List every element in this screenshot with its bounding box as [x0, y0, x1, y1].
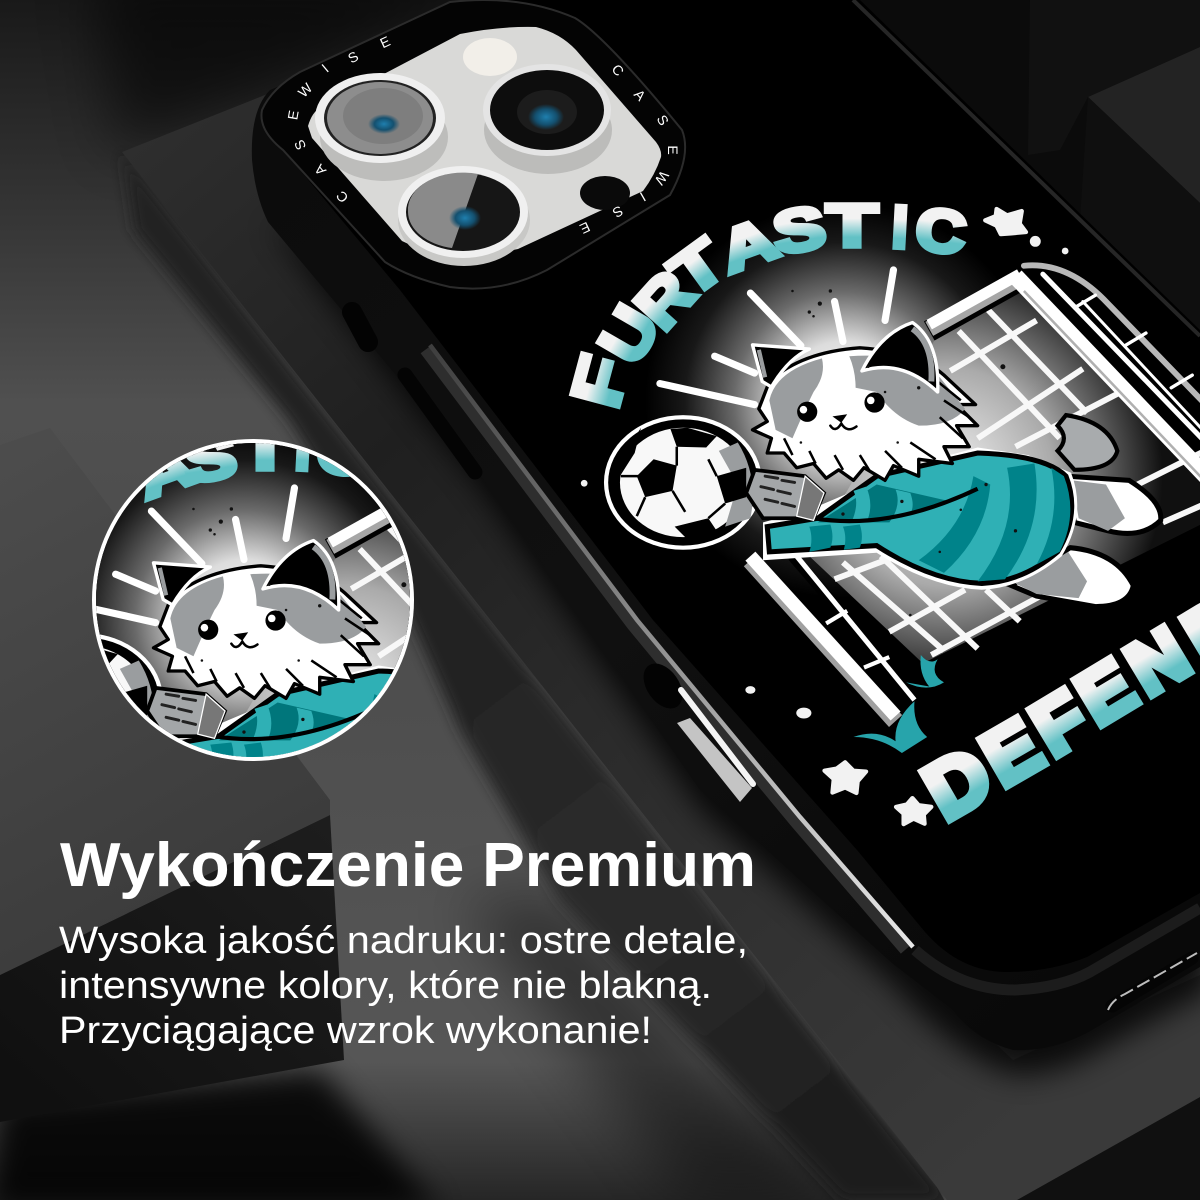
brand text on rim: E: [377, 33, 393, 51]
grey patch right: [849, 356, 965, 426]
speckle texture: [791, 289, 1017, 616]
description text: Wysoka jakość nadruku: ostre detale,: [59, 920, 748, 962]
lens: bottom: [398, 166, 530, 266]
eyes: [797, 402, 817, 422]
phone title: FURTASTIC: C: [912, 194, 970, 267]
glow behind cat: [645, 203, 1041, 598]
phone title: FURTASTIC: A: [710, 204, 786, 286]
nose and mouth: [832, 414, 847, 423]
cropped title letters: T: [239, 416, 291, 483]
silver button highlight: [681, 690, 753, 784]
silver button plate: [677, 718, 752, 802]
grey patch left: [769, 358, 823, 438]
phone case body: [252, 0, 1200, 1050]
stars: [824, 209, 1026, 824]
charging port: [1112, 958, 1192, 1006]
magnified detail circle: [92, 439, 414, 761]
brand text on rim: [284, 33, 681, 237]
back edge line: [853, 0, 1200, 336]
glove: [746, 470, 824, 520]
brand text on rim: I: [637, 189, 649, 205]
brand text on rim: W: [295, 79, 316, 100]
brand text on rim: I: [318, 61, 332, 75]
cropped title letters: C: [313, 416, 371, 489]
port highlight: [1108, 953, 1197, 1010]
cat head: [753, 323, 978, 480]
goal frame: [750, 274, 1200, 721]
phone title: FURTASTIC: S: [768, 193, 830, 267]
volume button: [405, 375, 475, 472]
fur strokes: [784, 381, 969, 472]
action button: [352, 312, 368, 342]
left ear: [753, 345, 809, 387]
goal back rim: [1024, 265, 1200, 468]
phone title: FURTASTIC: R: [621, 257, 709, 343]
camera island: [261, 0, 685, 289]
brand text on rim: S: [654, 112, 672, 128]
island rim: [261, 0, 685, 289]
description text: Przyciągające wzrok wykonanie!: [59, 1010, 652, 1052]
tail: [1058, 415, 1117, 470]
phone title: FURTASTIC: T: [826, 193, 878, 260]
brand text on rim: C: [333, 188, 351, 206]
back leg upper fur: [1072, 480, 1125, 531]
bottom curve reflection: [915, 908, 1200, 990]
phone screen: [292, 0, 1200, 972]
mic hole: [580, 176, 630, 210]
description text: [59, 920, 748, 1052]
phone title: FURTASTIC: T: [658, 226, 738, 311]
right ear: [862, 323, 938, 392]
phone title: DEFEND: D: [910, 730, 1006, 837]
cropped title letters: A: [127, 430, 203, 512]
heading: Wykończenie Premium: [60, 831, 756, 900]
phone title: FURTASTIC: U: [584, 293, 674, 376]
brand text on rim: E: [665, 145, 681, 155]
side buttons: [352, 312, 1197, 1010]
cropped title letters: [144, 443, 350, 504]
brand text on rim: S: [291, 137, 309, 153]
back leg lower fur: [1016, 552, 1087, 598]
cropped title letters: I: [293, 416, 313, 483]
back leg upper: [1066, 476, 1161, 533]
phone title: DEFEND: E: [967, 701, 1056, 803]
light rays: [660, 270, 893, 405]
brand text on rim: A: [310, 161, 329, 179]
brand text on rim: S: [345, 48, 361, 66]
brand text on rim: E: [577, 219, 593, 237]
brand text on rim: A: [631, 86, 649, 104]
phone title: FURTASTIC: F: [556, 347, 644, 415]
brand text on rim: C: [609, 61, 627, 79]
phone title: DEFEND: E: [1062, 643, 1150, 742]
phone title: DEFEND: F: [1016, 673, 1103, 773]
flash: [463, 38, 517, 76]
left ear edge: [759, 350, 765, 377]
goal net background: [809, 287, 1200, 663]
phone title: DEFEND: [910, 579, 1200, 837]
soccer ball: [604, 415, 762, 550]
phone title: FURTASTIC: [556, 193, 970, 415]
phone title: FURTASTIC: I: [890, 194, 910, 261]
cropped title letters: S: [179, 422, 241, 496]
phone drop shadow: [268, 222, 1200, 1075]
brand text on rim: E: [284, 109, 302, 121]
brand text on rim: S: [610, 203, 626, 221]
jersey body: [763, 448, 1077, 590]
right ear edge: [912, 329, 932, 381]
net lines: [835, 310, 1200, 655]
head fur: [753, 348, 978, 480]
grass: [853, 655, 944, 753]
back leg lower: [1011, 548, 1133, 607]
lens: right: [483, 64, 612, 174]
artwork: goalkeeper cat: [581, 203, 1200, 824]
brand text on rim: W: [651, 168, 672, 189]
camera control hole: [636, 656, 690, 716]
lens: left: [315, 73, 448, 181]
jersey stripes: [978, 464, 1037, 581]
dots: [581, 236, 1069, 719]
glass window: [308, 27, 661, 260]
glossy edge highlight: [430, 345, 913, 947]
soft edge band: [425, 350, 905, 950]
sleeve line: [814, 489, 978, 521]
description text: intensywne kolory, które nie blakną.: [59, 965, 712, 1007]
